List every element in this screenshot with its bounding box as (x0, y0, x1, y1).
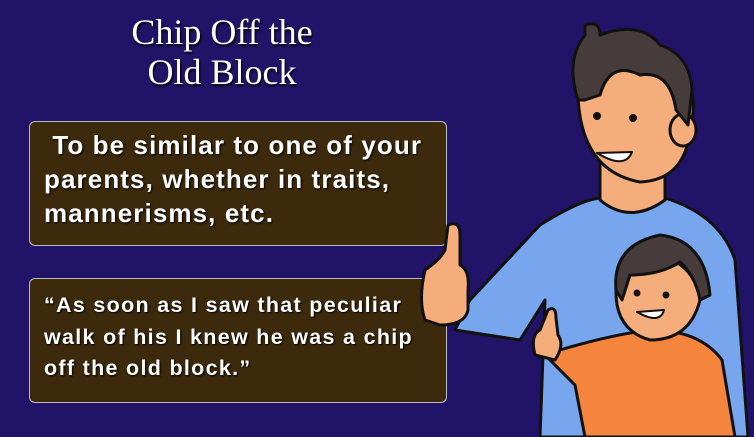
child head (616, 255, 700, 340)
definition box: To be similar to one of your (52, 130, 422, 160)
father thumb (422, 224, 468, 325)
child mouth (637, 310, 664, 318)
example box: walk of his I knew he was a chip (44, 324, 413, 348)
father head (578, 67, 693, 182)
definition box: parents, whether in traits, (44, 164, 390, 194)
child hair (616, 235, 710, 300)
example box (29, 278, 447, 403)
definition box (29, 121, 447, 246)
father hair (573, 24, 692, 125)
title: Chip Off the (131, 12, 313, 52)
title: Old Block (148, 52, 296, 92)
child shirt (545, 330, 735, 437)
eyes (593, 112, 670, 298)
definition box: mannerisms, etc. (44, 198, 274, 228)
father neck (600, 160, 665, 212)
example box: off the old block.” (44, 356, 251, 380)
father body (455, 198, 748, 437)
child thumb (533, 309, 561, 360)
title (131, 12, 314, 92)
example box: “As soon as I saw that peculiar (44, 293, 402, 317)
father mouth (597, 152, 632, 161)
